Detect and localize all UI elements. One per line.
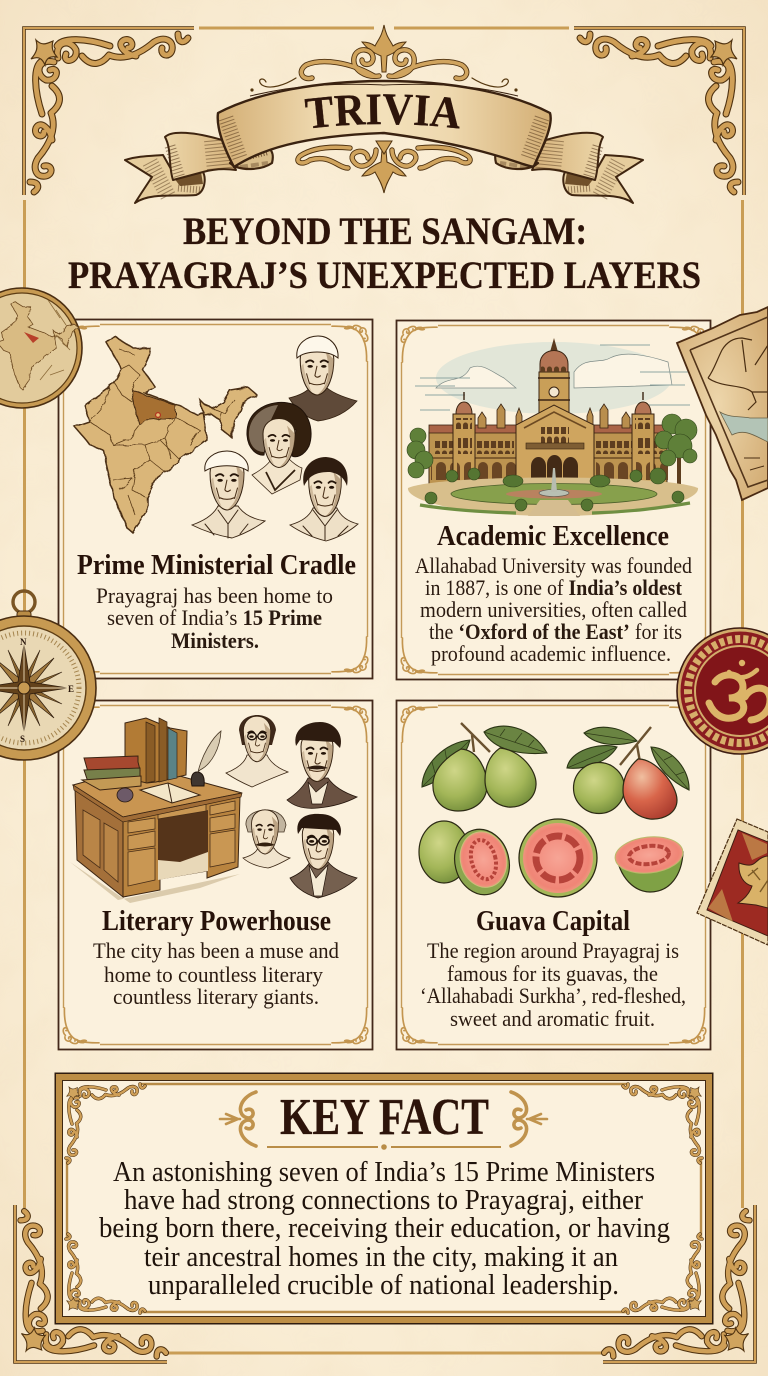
body text: seven of India’s 15 Prime (107, 605, 322, 630)
panel: key fact (56, 1074, 712, 1324)
decorative om medallion (677, 628, 768, 754)
portrait: statesman with cap, lower left (192, 451, 265, 538)
body text: Ministers. (171, 628, 259, 653)
decorative compass: S (20, 734, 25, 744)
body text: Allahabad University was founded (415, 553, 692, 578)
main band (218, 81, 551, 167)
key fact body: An astonishing seven of India’s 15 Prime Ministers (113, 1157, 655, 1188)
main title (68, 210, 701, 297)
body text (96, 583, 333, 653)
flourish: left of heading (220, 1092, 256, 1146)
main title: BEYOND THE SANGAM: (183, 210, 587, 253)
body text: the ‘Oxford of the East’ for its (429, 619, 682, 644)
corner ornament: bottom left (15, 1205, 167, 1362)
body text: famous for its guavas, the (447, 961, 658, 986)
portrait: man with dark hair (290, 457, 358, 541)
body text: The city has been a muse and (93, 938, 339, 963)
body text (420, 938, 686, 1031)
main title: PRAYAGRAJ’S UNEXPECTED LAYERS (68, 254, 701, 297)
body text: countless literary giants. (113, 984, 319, 1009)
heading: Academic Excellence (437, 521, 669, 552)
guava: whole and cut half (419, 821, 516, 901)
corner ornament: top right (574, 28, 744, 195)
heading: Guava Capital (476, 906, 630, 937)
body text: profound academic influence. (431, 641, 671, 666)
guava group: green and red fruits (567, 727, 689, 819)
guava: cut wedge (613, 834, 685, 892)
corner ornament: top left (24, 28, 194, 195)
portrait: man with moustache (287, 722, 357, 808)
writing desk illustration (70, 718, 242, 903)
body text: ‘Allahabadi Surkha’, red-fleshed, (420, 983, 686, 1008)
heading: Prime Ministerial Cradle (77, 550, 356, 581)
portrait: older man (243, 810, 290, 868)
key fact body: teir ancestral homes in the city, making it an (144, 1242, 618, 1273)
decorative postage stamp (697, 819, 768, 945)
key fact body (99, 1157, 670, 1301)
ornament below ribbon (298, 141, 470, 193)
decorative map coin (0, 288, 82, 408)
left tail (125, 133, 273, 203)
corner ornament: bottom right (603, 1205, 755, 1362)
guava group: two green fruits (422, 723, 547, 811)
decorative compass (0, 591, 96, 760)
body text: sweet and aromatic fruit. (450, 1006, 655, 1031)
body text: modern universities, often called (420, 597, 687, 622)
india map (75, 338, 257, 533)
body text: home to countless literary (104, 962, 323, 987)
flourish: right of heading (511, 1092, 547, 1146)
ornament above ribbon (250, 25, 518, 92)
panel: Academic Excellence (396, 320, 710, 680)
decorative parchment map (677, 307, 768, 500)
portrait: woman writer (226, 715, 288, 787)
guava: round cross section (519, 819, 597, 897)
heading: Literary Powerhouse (102, 906, 331, 937)
panel: Literary Powerhouse (58, 700, 372, 1050)
body text: in 1887, is one of India’s oldest (425, 575, 683, 600)
portrait: woman in sari (247, 402, 311, 494)
decorative compass: E (68, 684, 74, 694)
body text: The region around Prayagraj is (427, 938, 679, 963)
decorative compass: N (20, 637, 27, 647)
body text (93, 938, 339, 1009)
panel: Prime Ministerial Cradle (58, 320, 372, 678)
key fact body: unparalleled crucible of national leadership. (148, 1270, 619, 1301)
portrait: statesman with cap, top right (289, 336, 357, 421)
heading rule (267, 1144, 501, 1150)
key fact body: being born there, receiving their education, or having (99, 1213, 670, 1244)
title ribbon (124, 80, 644, 204)
university building illustration (407, 338, 698, 516)
key fact heading: KEY FACT (280, 1089, 489, 1146)
title ribbon: TRIVIA (304, 94, 460, 129)
ribbon heading (305, 124, 462, 129)
key fact body: have had strong connections to Prayagraj, either (124, 1185, 644, 1216)
icon: om symbol (709, 661, 768, 720)
body text: Prayagraj has been home to (96, 583, 333, 608)
portrait: man with glasses (290, 814, 357, 898)
panel: Guava Capital (396, 700, 710, 1050)
body text (415, 553, 692, 666)
